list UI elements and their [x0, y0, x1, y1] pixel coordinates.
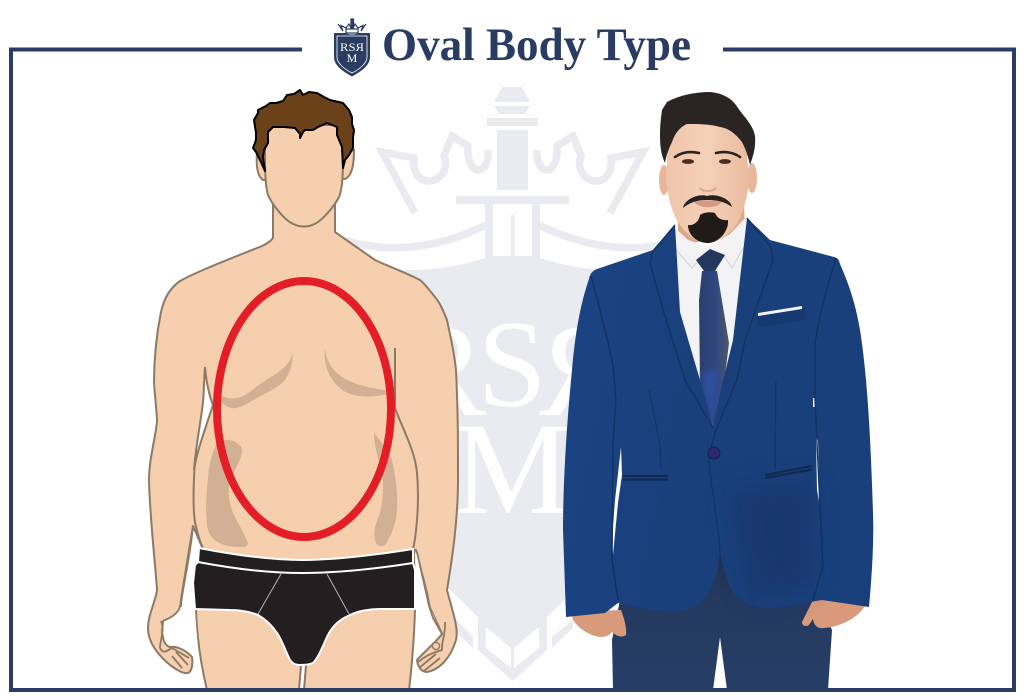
watermark monogram [397, 296, 628, 542]
white gap left of waist [164, 530, 201, 652]
left hip pocket [623, 476, 668, 480]
right hip pocket [765, 466, 812, 478]
lips [694, 200, 722, 207]
breast pocket [757, 308, 805, 327]
briefs seams [258, 574, 349, 614]
tie [696, 249, 729, 426]
briefs [193, 548, 415, 665]
right hand [802, 596, 866, 628]
sleeve gaps [612, 398, 820, 555]
logo monogram: RSЯ [340, 42, 364, 54]
white gap between arm and torso [194, 367, 213, 470]
abdomen shading [206, 349, 397, 547]
watermark crown [345, 136, 680, 248]
watermark monogram: Я [539, 296, 628, 444]
ears [257, 150, 354, 180]
watermark monogram: S [478, 296, 546, 433]
illustrated oval body figure [148, 90, 458, 690]
watermark monogram: R [397, 296, 487, 444]
logo crown [338, 19, 366, 33]
white gap right of waist [416, 552, 441, 655]
head and face [666, 118, 749, 243]
watermark shield tip panels [486, 627, 539, 668]
jacket shading [730, 480, 812, 600]
header logo [334, 19, 370, 76]
watermark side strips [417, 580, 573, 648]
logo shield inner line [337, 36, 367, 73]
face [265, 125, 343, 226]
hand knuckle [432, 642, 440, 650]
goatee [688, 212, 728, 243]
jacket button [708, 447, 720, 459]
mustache [683, 195, 732, 208]
pocket square [758, 306, 802, 316]
hair [253, 90, 354, 171]
photo-style man in blue suit [563, 92, 873, 690]
hand details [160, 526, 445, 671]
logo shield [334, 33, 370, 76]
watermark finial and column [456, 87, 569, 262]
torso side lines [194, 348, 418, 550]
ears [659, 163, 757, 195]
watermark: brand crest [345, 87, 680, 681]
shirt [675, 216, 749, 420]
jacket lapels and seams [591, 218, 836, 600]
eyes [682, 159, 731, 164]
trousers [612, 540, 832, 690]
hair [660, 92, 755, 165]
title: Oval Body Type [382, 19, 691, 71]
jacket [563, 218, 873, 617]
logo monogram [340, 42, 364, 65]
watermark shield [350, 255, 675, 681]
shirt collar shadow [676, 240, 748, 268]
body silhouette [148, 200, 458, 690]
red oval highlight [217, 281, 391, 537]
eyebrows [675, 152, 740, 157]
neck [678, 200, 745, 245]
logo monogram: M [347, 51, 358, 65]
nose [700, 188, 716, 191]
left hand [571, 610, 626, 637]
briefs waistband line [198, 562, 413, 573]
watermark monogram: M [453, 395, 571, 542]
